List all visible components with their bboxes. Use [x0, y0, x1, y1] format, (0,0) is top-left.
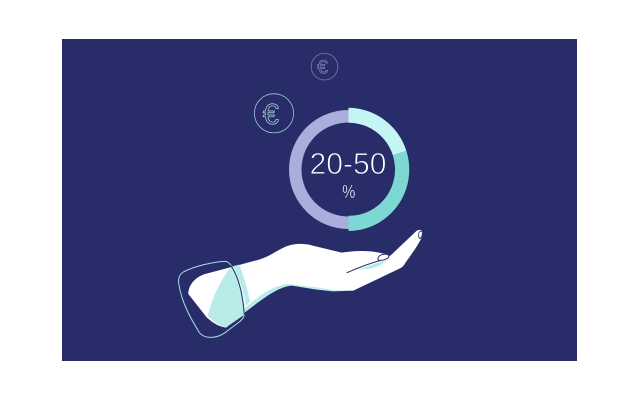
- sleeve front edge: [231, 265, 244, 315]
- navy background panel: [62, 39, 577, 361]
- sleeve outline: [179, 261, 244, 337]
- value label: 20-50: [310, 146, 386, 181]
- thumb nail: [378, 254, 389, 260]
- palm crease line: [347, 260, 382, 273]
- hand silhouette: [188, 230, 423, 327]
- donut chart: 20-50 percent: [289, 108, 409, 231]
- underarm shade: [243, 283, 353, 314]
- finger nail: [419, 231, 422, 239]
- wrist strip: [233, 265, 250, 306]
- icon: large euro coin: [254, 94, 294, 133]
- ring segment: lavender: [289, 110, 348, 229]
- icon: large euro coin: €: [263, 99, 279, 131]
- illustration: open hand: [179, 230, 423, 337]
- ring segment: pale aqua: [348, 108, 406, 155]
- percent label: %: [342, 182, 355, 202]
- icon: small euro coin: [311, 53, 338, 80]
- ring segment: teal: [348, 151, 409, 231]
- cuff shade: [208, 267, 244, 328]
- palm shade: [357, 260, 387, 270]
- icon: small euro coin: €: [317, 58, 328, 78]
